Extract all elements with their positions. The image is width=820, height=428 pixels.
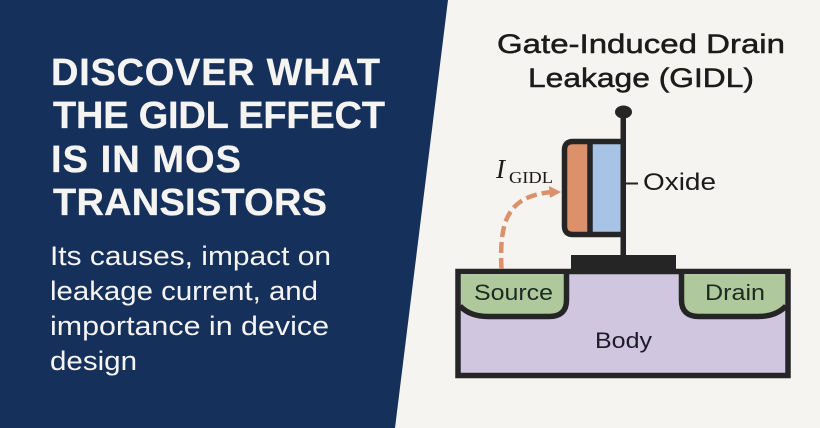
gate orange layer [564, 142, 590, 234]
subheading text block: design [50, 346, 137, 376]
I GIDL label [495, 154, 553, 187]
subheading text block [50, 241, 331, 376]
panel: navy headline panel [0, 0, 448, 428]
heading: IS IN MOS [51, 139, 241, 181]
I GIDL label: GIDL [509, 168, 553, 187]
heading: TRANSISTORS [53, 182, 327, 224]
gate terminal dot [615, 106, 632, 118]
source label: Source [474, 280, 553, 305]
drain outline [682, 272, 786, 316]
gate stack outline [564, 142, 621, 234]
subheading text block: leakage current, and [50, 276, 318, 306]
source region [461, 274, 566, 316]
arrow: leakage current path [501, 186, 561, 269]
heading [51, 52, 385, 224]
subheading text block: importance in device [50, 311, 329, 341]
I GIDL label: I [495, 154, 507, 184]
diagram title [497, 29, 785, 93]
body substrate [458, 272, 788, 376]
heading: THE GIDL EFFECT [53, 95, 385, 137]
diagram title: Gate-Induced Drain [497, 29, 785, 59]
gate contact plate [571, 255, 676, 273]
oxide label: Oxide [643, 169, 716, 196]
gate stem [620, 112, 626, 257]
drain region [682, 274, 785, 316]
body label: Body [595, 328, 653, 353]
transistor diagram [458, 106, 788, 376]
oxide leader line [626, 182, 638, 184]
diagram title: Leakage (GIDL) [528, 63, 754, 93]
source outline [460, 272, 566, 316]
oxide blue layer [590, 142, 621, 234]
heading: DISCOVER WHAT [51, 52, 380, 94]
drain label: Drain [705, 280, 765, 305]
subheading text block: Its causes, impact on [50, 241, 331, 271]
